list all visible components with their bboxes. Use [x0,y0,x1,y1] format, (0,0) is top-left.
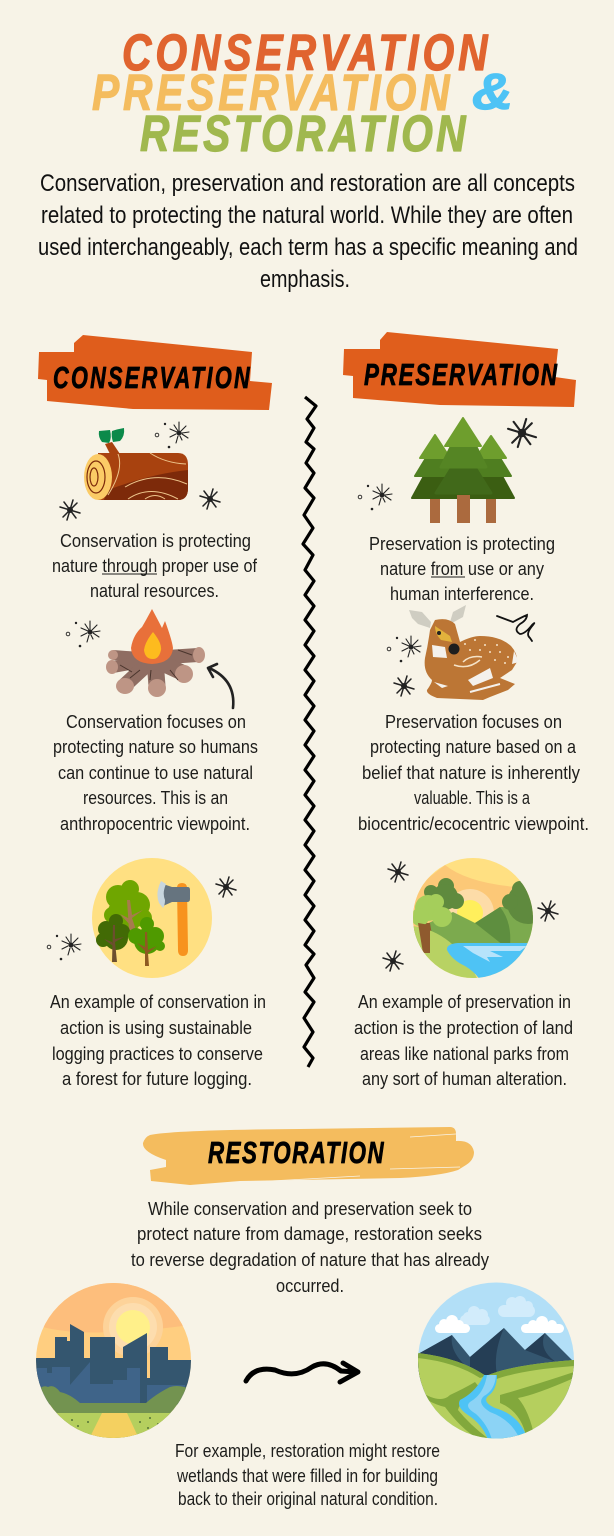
icon: pine trees [412,418,514,523]
icon: forest and axe [92,858,212,978]
title: RESTORATION [140,105,467,162]
icon: sparkle beside campfire [66,621,100,647]
text: conservation focus: resources. This is an [83,787,228,808]
text: preservation example: action is the protection of land [354,1017,573,1038]
text: conservation example: action is using sustainable [60,1017,252,1038]
text: preservation focus: Preservation focuses on [385,711,562,732]
intro text: emphasis. [260,266,350,293]
heading: conservation: CONSERVATION [53,360,250,395]
panel: restoration [36,1127,574,1509]
text: conservation definition: nature through proper use of [52,555,258,576]
heading: restoration: RESTORATION [208,1135,384,1170]
heading: preservation [343,332,576,407]
icon: squiggle and sparkles around deer [387,615,534,696]
text: restoration description: protect nature from damage, restoration seeks [137,1223,482,1244]
intro text [38,170,578,293]
text: preservation focus: protecting nature based on a [370,736,577,757]
arrow: curved to campfire [208,664,233,708]
text: conservation focus: protecting nature so humans [53,736,258,757]
text: restoration description: occurred. [276,1275,344,1296]
icon: sparkles around trees [358,419,536,510]
icon: resting deer [409,605,519,700]
arrow: transformation [246,1363,358,1382]
title: PRESERVATION [92,64,451,121]
text: preservation focus: valuable. This is a [414,787,531,808]
title [92,24,513,162]
text: conservation example: a forest for future logging. [62,1068,252,1089]
text: preservation focus: belief that nature is inherently [362,762,581,783]
heading: conservation [38,335,272,410]
text: preservation focus: biocentric/ecocentric viewpoint. [358,813,589,834]
icon: landscape with sun and lake [413,858,533,978]
heading: restoration [143,1127,474,1185]
text: conservation focus [53,711,258,834]
text: restoration example: For example, restoration might restore [175,1440,440,1461]
text: conservation definition: Conservation is protecting [60,530,251,551]
text: preservation example: An example of preservation in [358,991,571,1012]
icon: city at sunset [36,1283,192,1441]
icon: sparkles around axe circle [47,877,236,960]
text: conservation focus: anthropocentric viewpoint. [60,813,250,834]
text: restoration example [175,1440,440,1509]
icon: restored mountains and river [418,1282,574,1440]
text: preservation definition [369,533,555,604]
icon: log with sprout [84,428,188,500]
text: conservation example: logging practices to conserve [52,1043,263,1064]
text: preservation focus [358,711,589,834]
divider: zigzag line [303,397,316,1067]
text: conservation definition: natural resources. [90,580,219,601]
text: conservation focus: can continue to use natural [58,762,253,783]
panel: conservation [38,335,272,1089]
text: preservation example [354,991,573,1089]
panel: preservation [343,332,589,1089]
text: conservation definition [52,530,258,601]
text: preservation example: areas like national parks from [360,1043,569,1064]
text: preservation definition: Preservation is protecting [369,533,555,554]
heading: preservation: PRESERVATION [364,357,557,392]
icon: campfire [106,609,205,697]
text: preservation definition: nature from use or any [380,558,545,579]
text: restoration description [131,1198,490,1296]
text: conservation example: An example of conservation in [50,991,266,1012]
title: CONSERVATION [122,24,489,81]
icon: sparkles around log [60,422,220,520]
text: restoration example: back to their original natural condition. [178,1488,438,1509]
text: restoration description: to reverse degradation of nature that has already [131,1249,490,1270]
title: & [472,63,513,120]
text: conservation example [50,991,266,1089]
text: restoration description: While conservation and preservation seek to [148,1198,472,1219]
text: restoration example: wetlands that were filled in for building [176,1465,438,1486]
text: conservation focus: Conservation focuses on [66,711,246,732]
icon: sparkles around landscape [383,862,558,971]
text: preservation example: any sort of human alteration. [362,1068,567,1089]
text: preservation definition: human interference. [390,583,534,604]
